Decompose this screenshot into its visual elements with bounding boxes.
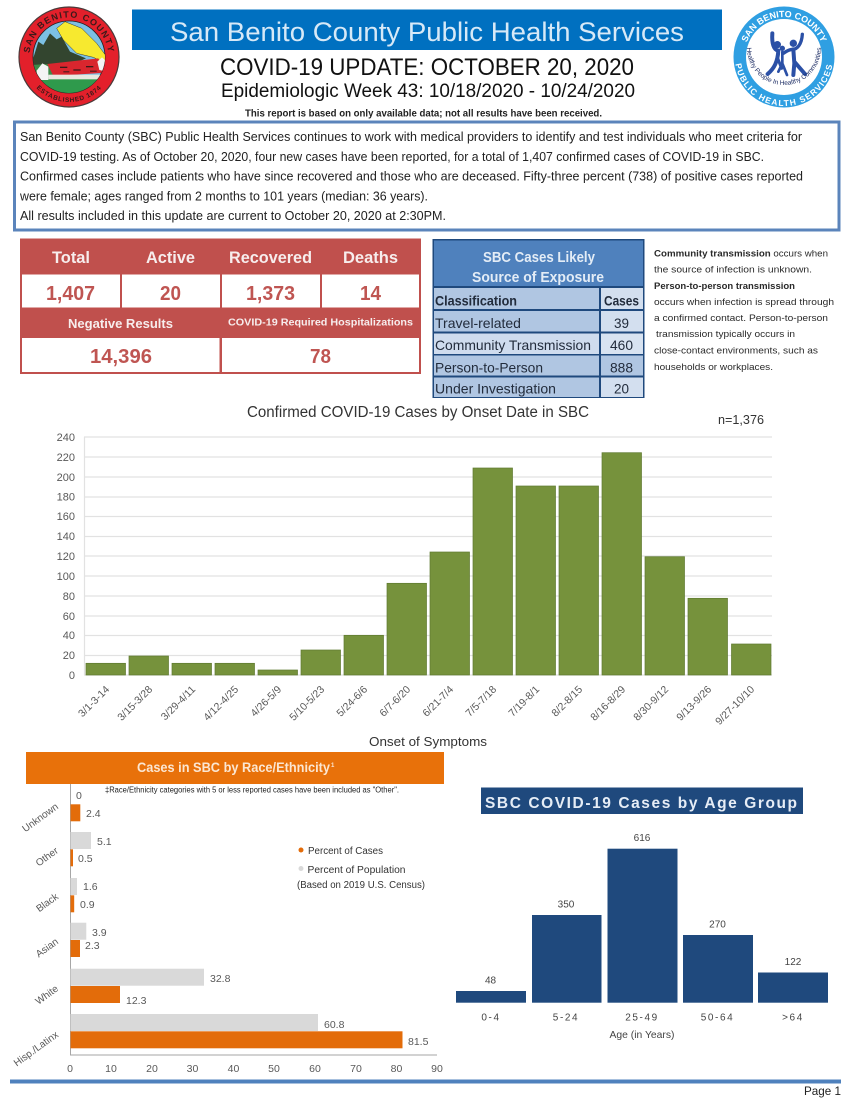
header title banner [132,10,722,50]
bar chart: race and ethnicity: Unknown [21,802,61,835]
bar chart: cases by onset date: 6/7-6/20 [377,684,413,719]
bar chart: race and ethnicity: 60 [309,1063,321,1075]
bar chart: age groups: >64 [782,1012,804,1024]
panel: case totals table: Deaths [343,248,398,267]
bar chart: cases by onset date: 7/19-8/1 [506,684,542,719]
bar chart: cases by onset date: 9/13-9/26 [674,684,714,723]
bar chart: cases by onset date: 160 [57,511,75,523]
bar chart: cases by onset date: 4/12-4/25 [201,684,241,723]
bar chart: race and ethnicity: 32.8 [210,973,231,985]
bar chart: age groups: 0-4 [481,1012,501,1024]
panel: source of exposure table: 39 [614,315,629,331]
transmission definitions text: the source of infection is unknown. [654,264,812,276]
panel: summary text box [14,122,839,230]
transmission definitions text [654,248,834,373]
bar chart: race and ethnicity: Hisp./Latinx [12,1030,61,1069]
bar chart: race and ethnicity [12,784,443,1075]
race/ethnicity legend [297,846,425,891]
bar chart: cases by onset date: 8/2-8/15 [549,684,585,719]
panel: case totals table: 20 [160,283,181,305]
bar chart: race and ethnicity: 20 [146,1063,158,1075]
bar chart: cases by onset date: 20 [63,650,75,662]
panel: case totals table: 78 [310,346,331,368]
transmission definitions text: Community transmission occurs when [654,248,828,260]
transmission definitions text: a confirmed contact. Person-to-person [654,313,828,324]
bar chart: race and ethnicity: 60.8 [324,1019,345,1031]
race/ethnicity legend: Percent of Population [308,865,406,876]
bar chart: age groups: 5-24 [553,1012,579,1024]
bar chart: race and ethnicity: 1.6 [83,881,98,893]
panel: source of exposure table: Classification [435,292,517,308]
bar chart: race and ethnicity: 12.3 [126,995,147,1007]
county seal logo: SAN BENITO COUNTY [24,11,114,53]
bar chart: cases by onset date: 220 [57,452,75,464]
bar chart: race and ethnicity: Asian [34,937,61,960]
bar chart: race and ethnicity: 5.1 [97,836,112,848]
public health services logo: PUBLIC HEALTH SERVICES [736,63,832,106]
race/ethnicity chart banner: 1 [331,763,335,769]
bar chart: race and ethnicity: White [34,983,61,1007]
bar chart: age groups: 350 [558,900,575,910]
bar chart: age groups [456,833,828,1041]
bar chart: race and ethnicity: 0.9 [80,899,95,911]
bar chart: race and ethnicity: Black [35,891,62,915]
bar chart: race and ethnicity: 40 [228,1063,239,1075]
bar chart: cases by onset date: 240 [57,432,75,444]
transmission definitions text: occurs when infection is spread through [654,297,834,308]
race/ethnicity legend: (Based on 2019 U.S. Census) [297,880,425,891]
panel: source of exposure table: 460 [610,337,633,353]
bar chart: race and ethnicity: 10 [105,1063,117,1075]
bar chart: age groups: 25-49 [625,1012,659,1024]
bar chart: race and ethnicity: 50 [268,1063,280,1075]
bar chart: age groups: 48 [485,976,496,986]
footer rule [10,1080,841,1084]
bar chart: cases by onset date: 200 [57,472,75,484]
race/ethnicity legend: Percent of Cases [308,846,383,857]
onset chart sample size: n=1,376 [718,413,764,427]
panel: summary text box: San Benito County (SBC) Public Health Services continues to work with medical providers to identify and test individuals who meet criteria for [20,130,802,144]
bar chart: age groups: 50-64 [701,1012,734,1024]
panel: source of exposure table: 20 [614,380,629,396]
bar chart: age groups: 270 [709,920,726,930]
county seal logo: ESTABLISHED 1874 [36,85,101,102]
public health services logo: Healthy People In Healthy Communities [746,48,821,85]
public health services logo: SAN BENITO COUNTY [742,10,827,42]
bar chart: race and ethnicity: 3.9 [92,927,107,939]
bar chart: age groups: Age (in Years) [610,1029,674,1041]
bar chart: race and ethnicity: 2.3 [85,940,100,952]
bar chart: cases by onset date: 8/30-9/12 [631,684,671,723]
bar chart: cases by onset date: 180 [57,492,75,504]
age group chart title [481,788,803,814]
panel: case totals table: COVID-19 Required Hospitalizations [228,316,413,328]
transmission definitions text: transmission typically occurs in [656,329,795,340]
panel: source of exposure table: Travel-related [435,315,521,331]
panel: summary text box: were female; ages ranged from 2 months to 101 years (median: 36 years). [19,190,428,204]
bar chart: age groups: 122 [785,957,802,968]
bar chart: race and ethnicity: 0 [76,790,82,802]
panel: summary text box: COVID-19 testing. As of October 20, 2020, four new cases have been reported, for a total of 1,407 confirmed cases of COVID-19 in SBC. [20,150,764,164]
county seal logo [18,6,120,108]
bar chart: cases by onset date: 3/29-4/11 [159,684,198,723]
data availability note: This report is based on only available data; not all results have been received. [245,108,602,120]
panel: case totals table: Negative Results [68,317,173,331]
race/ethnicity chart banner: Cases in SBC by Race/Ethnicity [137,760,330,775]
bar chart: cases by onset date: 3/15-3/28 [115,684,155,723]
bar chart: race and ethnicity: Other [34,845,61,869]
bar chart: cases by onset date: 120 [57,551,75,563]
panel: case totals table: Total [52,248,90,267]
header title banner: San Benito County Public Health Services [170,17,684,47]
bar chart: race and ethnicity: 0 [67,1063,73,1075]
bar chart: cases by onset date: 5/24-6/6 [334,684,370,719]
bar chart: cases by onset date: 9/27-10/10 [713,684,757,728]
panel: case totals table [20,238,421,374]
panel: source of exposure table: Person-to-Person [435,360,543,376]
bar chart: race and ethnicity: 80 [391,1063,402,1075]
bar chart: race and ethnicity: 2.4 [86,808,101,820]
bar chart: cases by onset date: 0 [69,670,75,682]
bar chart: race and ethnicity: 30 [187,1063,198,1075]
transmission definitions text: Person-to-person transmission [654,281,795,292]
transmission definitions text: households or workplaces. [654,362,773,373]
bar chart: cases by onset date: 5/10-5/23 [287,684,327,723]
panel: source of exposure table: Under Investigation [435,380,556,396]
panel: summary text box: Confirmed cases include patients who have since recovered and those who are deceased. Fifty-three percent (738) of positive cases reported [20,170,803,184]
panel: case totals table: 1,407 [46,283,95,305]
panel: source of exposure table: Cases [604,292,639,308]
panel: source of exposure table: Source of Exposure [472,270,604,286]
bar chart: race and ethnicity: 0.5 [78,853,93,865]
bar chart: cases by onset date [57,432,772,728]
panel: source of exposure table: 888 [610,360,633,376]
panel: summary text box: All results included in this update are current to October 20, 2020 at 2:30PM. [20,209,446,223]
bar chart: cases by onset date: 140 [57,531,75,543]
onset chart title: Confirmed COVID-19 Cases by Onset Date in SBC [247,404,589,421]
bar chart: race and ethnicity: 90 [431,1063,443,1075]
onset chart x-axis title: Onset of Symptoms [369,734,488,749]
panel: case totals table: 14 [360,283,382,305]
bar chart: cases by onset date: 80 [63,591,75,603]
panel: source of exposure table [432,239,644,398]
race/ethnicity chart banner [26,752,444,784]
bar chart: cases by onset date: 8/16-8/29 [588,684,628,723]
page number: Page 1 [804,1084,841,1098]
panel: source of exposure table: Community Transmission [435,337,591,353]
age group chart title: SBC COVID-19 Cases by Age Group [485,795,797,812]
update date heading: COVID-19 UPDATE: OCTOBER 20, 2020 [220,54,634,81]
bar chart: cases by onset date: 7/5-7/18 [463,684,499,719]
bar chart: cases by onset date: 40 [63,630,75,642]
bar chart: cases by onset date: 100 [57,571,75,583]
panel: source of exposure table: SBC Cases Likely [483,250,595,266]
race/ethnicity footnote: ‡Race/Ethnicity categories with 5 or less reported cases have been included as "Other". [105,786,399,794]
epidemiologic week subheading: Epidemiologic Week 43: 10/18/2020 - 10/24/2020 [221,80,635,102]
panel: case totals table: Active [146,248,195,267]
panel: case totals table: Recovered [229,248,312,267]
bar chart: age groups: 616 [634,833,651,844]
bar chart: cases by onset date: 4/26-5/9 [248,684,284,719]
bar chart: race and ethnicity: 81.5 [408,1036,429,1048]
panel: case totals table: 1,373 [246,283,295,305]
bar chart: cases by onset date: 60 [63,611,75,623]
transmission definitions text: close-contact environments, such as [654,346,818,356]
panel: case totals table: 14,396 [90,346,152,368]
public health services logo [734,6,834,108]
bar chart: cases by onset date: 6/21-7/4 [420,684,456,719]
bar chart: race and ethnicity: 70 [350,1063,362,1075]
bar chart: cases by onset date: 3/1-3-14 [76,684,112,720]
